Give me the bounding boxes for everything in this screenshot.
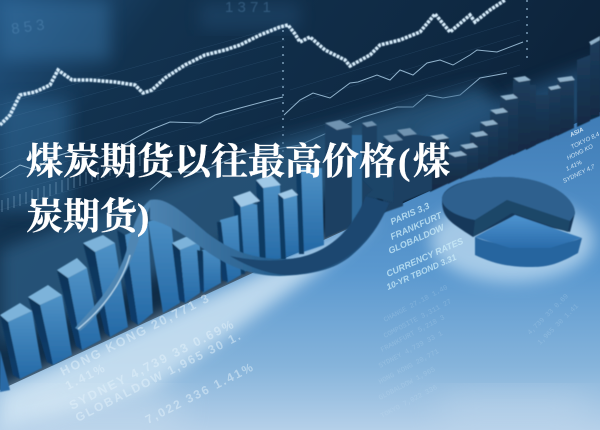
faded data columns on floor: COMPOSITE 3,311 27 <box>383 298 453 341</box>
volume strip <box>2 154 140 212</box>
floor ticker text: world markets: GLOBALDOW 1,965 30 1. <box>73 328 245 425</box>
floor ticker text: currency rates <box>385 201 465 292</box>
faded data columns on floor: GLOBALDOW 1,965 <box>378 366 437 403</box>
light reflective floor <box>0 112 600 430</box>
floor ticker text: world markets <box>58 291 257 427</box>
floor ticker text: currency rates: 10-YR TBOND 3.31 <box>385 252 458 292</box>
top-right ticker text on floor: SYDNEY 4,7 <box>562 164 597 185</box>
hazy band behind the bars <box>0 60 600 345</box>
floor ticker text: currency rates: FRANKFURT <box>389 210 445 242</box>
faded data columns on floor: FRANKFURT 5,218 3 <box>380 314 446 355</box>
floor ticker text: currency rates: PARIS 3,3 <box>389 201 431 227</box>
white candlestick price line <box>0 0 505 125</box>
dotted vertical scale <box>283 0 527 160</box>
title: 炭期货) <box>26 196 149 238</box>
title: 煤 <box>412 141 450 183</box>
floor ticker text: world markets: 7,022 336 1.41% <box>143 359 257 427</box>
bar chart: middle bars behind title <box>233 120 432 274</box>
pie chart <box>442 177 582 267</box>
bar chart: foreground blue bars, left side <box>0 212 241 392</box>
top-right ticker text on floor: HONG KO <box>566 144 595 162</box>
ticker numbers at top of screen: 8 5 3 <box>10 16 46 38</box>
floor ticker text: world markets: SYDNEY 4,739 33 0.69% <box>67 317 238 413</box>
icon: arrow head <box>362 160 394 202</box>
floor ticker text: currency rates: GLOBALDOW <box>387 222 447 256</box>
pie: lighter slice side <box>475 237 582 267</box>
pie: dark top surface <box>442 177 575 221</box>
faded data columns on floor: CHANGE 27.18 1.40 <box>383 284 449 325</box>
arrow ribbon rising through the bars <box>75 196 389 331</box>
faded data columns on floor: TOKYO 7,022 336 <box>380 384 439 421</box>
floor ticker text: world markets: 1.41% <box>63 360 109 393</box>
faded data columns on floor: 1,965 30 1.41 <box>536 303 581 347</box>
faded data columns on floor: HONG KONG 20,771 <box>378 348 441 387</box>
top-right ticker text on floor: TOKYO 8,4 <box>570 132 600 151</box>
faded data columns on floor <box>378 284 581 421</box>
faded data columns on floor: 4,739 33 0.69 <box>526 293 571 337</box>
bar chart: rising dark bars, right side <box>430 36 600 192</box>
thin line chart <box>0 42 523 190</box>
pie: dark body <box>442 177 575 237</box>
top-right ticker text on floor <box>562 127 600 185</box>
title: 煤炭期货以往最高价格 <box>26 142 396 183</box>
ticker numbers at top of screen <box>10 0 271 38</box>
pie: lighter slice top <box>475 215 582 248</box>
floor ticker text: currency rates: CURRENCY RATES <box>385 236 465 279</box>
top-right ticker text on floor: ASIA <box>568 127 585 139</box>
pie: inner wedge wall <box>473 200 570 237</box>
floor ticker text: world markets: HONG KONG 20,771 3 <box>58 291 213 379</box>
top-right ticker text on floor: 1.41% <box>565 160 584 173</box>
title <box>25 141 450 238</box>
faded data columns on floor: SYDNEY 4,739 33 1 <box>378 330 444 371</box>
title: ( <box>398 142 410 183</box>
